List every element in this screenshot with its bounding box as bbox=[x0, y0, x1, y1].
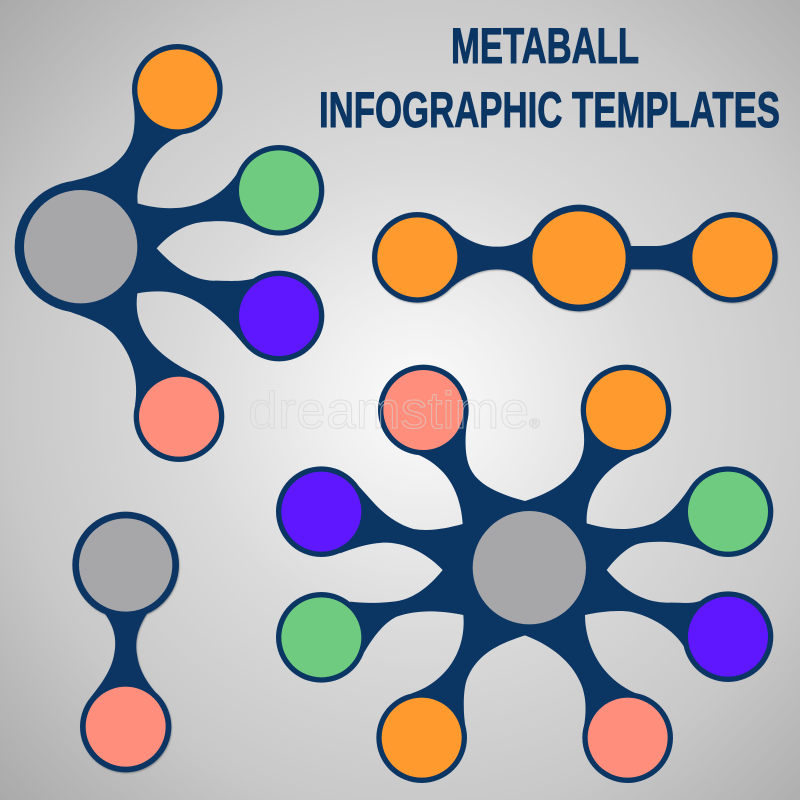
node: purple bbox=[234, 271, 324, 361]
node: orange top right bbox=[581, 365, 671, 455]
metaball diagram: left tree with four branches bbox=[15, 44, 324, 462]
node: salmon top left bbox=[378, 365, 469, 455]
connectors bbox=[50, 97, 257, 405]
node: orange left bbox=[372, 212, 463, 303]
node: salmon bbox=[80, 681, 171, 772]
node: green left bbox=[276, 592, 367, 683]
title bbox=[319, 18, 780, 138]
connector bbox=[91, 612, 161, 698]
node: orange centre bbox=[526, 205, 632, 311]
connectors bbox=[447, 223, 699, 290]
node: salmon bottom right bbox=[582, 692, 673, 783]
watermark: dreamstime ® bbox=[248, 382, 541, 440]
node: orange right bbox=[687, 212, 778, 303]
title: METABALL bbox=[451, 18, 639, 74]
node: green right bbox=[683, 466, 773, 557]
connectors bbox=[340, 417, 705, 728]
metaball diagram: star with eight branches bbox=[276, 365, 773, 783]
node: green bbox=[234, 145, 324, 236]
node: purple right bbox=[683, 591, 773, 682]
metaball diagram: vertical pair of nodes bbox=[72, 512, 179, 772]
center node: grey bbox=[464, 503, 594, 633]
metaball diagram: horizontal chain of three orange nodes bbox=[372, 205, 778, 311]
node: salmon bbox=[134, 371, 224, 462]
node: purple left bbox=[276, 466, 367, 557]
node: orange bottom left bbox=[376, 692, 467, 783]
node: grey bbox=[72, 512, 179, 618]
node: orange bbox=[132, 44, 223, 135]
center node: grey bbox=[15, 181, 147, 313]
